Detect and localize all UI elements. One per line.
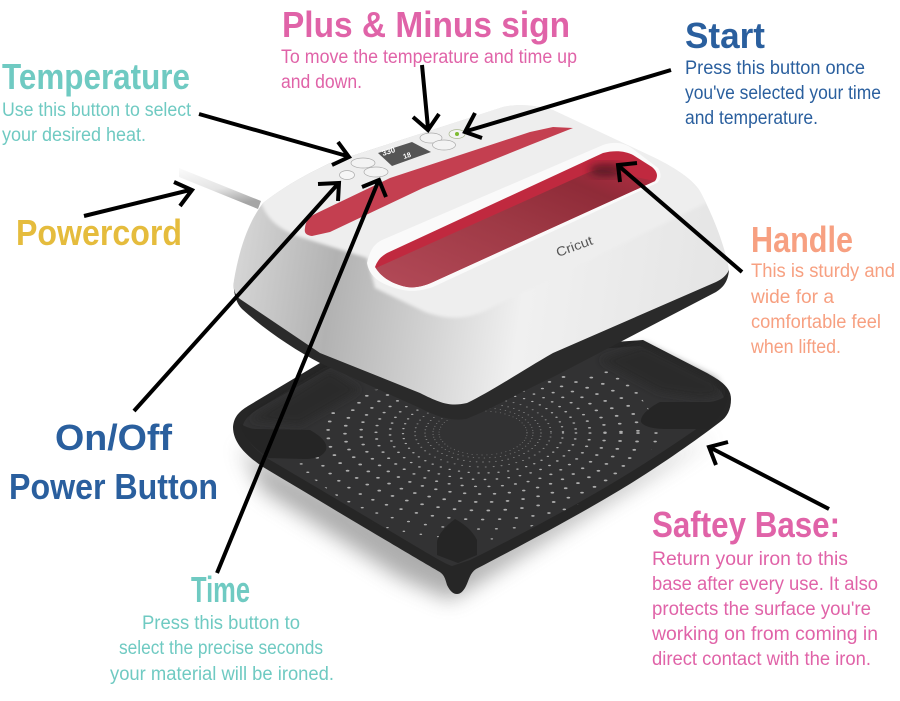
description: your desired heat. xyxy=(2,125,146,146)
arrow: on/off xyxy=(134,183,339,411)
description: Press this button once xyxy=(685,58,865,79)
display readout: 330 xyxy=(381,145,397,158)
description: you've selected your time xyxy=(685,83,881,104)
left foot xyxy=(240,424,326,459)
handle rim xyxy=(367,143,661,291)
arrow: handle xyxy=(618,163,742,272)
label: handle xyxy=(750,219,895,358)
label: time xyxy=(110,569,334,685)
cricut logo: Cricut xyxy=(554,233,595,260)
description: base after every use. It also xyxy=(652,574,878,595)
description: Return your iron to this xyxy=(652,549,848,570)
handle shadow xyxy=(589,163,623,177)
arrow: start xyxy=(465,70,671,138)
press shell xyxy=(234,105,729,405)
description: and temperature. xyxy=(685,108,818,129)
description: select the precise seconds xyxy=(119,638,323,659)
start icon xyxy=(455,132,459,136)
control panel xyxy=(340,130,465,180)
heading: Saftey Base: xyxy=(652,504,840,545)
description xyxy=(750,261,895,358)
display seconds: 18 xyxy=(402,152,412,161)
label: plus and minus xyxy=(281,4,577,93)
handle recess floor xyxy=(376,170,655,287)
description: Press this button to xyxy=(142,613,300,634)
arrow: plus and minus xyxy=(413,65,439,130)
description: and down. xyxy=(281,72,362,93)
power button xyxy=(340,170,354,180)
description: Use this button to select xyxy=(2,100,192,121)
press top face xyxy=(262,106,518,318)
time button xyxy=(364,167,388,177)
description: To move the temperature and time up xyxy=(281,47,577,68)
arrow: powercord xyxy=(84,182,192,216)
safety base xyxy=(233,327,731,600)
temperature button xyxy=(351,158,375,168)
description: when lifted. xyxy=(750,337,841,358)
description xyxy=(2,100,192,146)
arrow: time xyxy=(217,180,386,573)
description: your material will be ironed. xyxy=(110,664,334,685)
perforation holes xyxy=(300,372,658,540)
description xyxy=(685,58,881,129)
minus button xyxy=(432,140,456,150)
power cord xyxy=(179,168,261,209)
arrow: safety base xyxy=(709,442,829,509)
description: protects the surface you're xyxy=(652,599,871,620)
description xyxy=(651,549,878,670)
description: comfortable feel xyxy=(751,312,881,333)
description xyxy=(110,613,334,685)
description: wide for a xyxy=(750,287,834,308)
label: safety base xyxy=(651,504,878,670)
heading: Plus & Minus sign xyxy=(282,4,570,45)
arrow: temperature xyxy=(199,114,349,165)
base tray xyxy=(233,340,731,594)
label: on/off power button xyxy=(9,417,218,507)
red strip xyxy=(305,127,573,236)
handle recess xyxy=(375,151,657,287)
back walls xyxy=(250,345,722,425)
label: start xyxy=(685,15,881,129)
black bottom plate xyxy=(234,270,729,420)
bottom foot xyxy=(437,519,477,563)
heading: Temperature xyxy=(2,56,190,97)
label: on/off power button: Power Button xyxy=(9,466,218,507)
description: working on from coming in xyxy=(651,624,878,645)
label: on/off power button: On/Off xyxy=(55,417,173,458)
heat press xyxy=(234,95,729,420)
heading: Start xyxy=(685,15,765,56)
heading: Time xyxy=(191,569,250,610)
start button xyxy=(449,130,465,138)
display xyxy=(378,142,431,166)
heading: Handle xyxy=(751,219,853,260)
label: powercord: Powercord xyxy=(16,212,182,253)
base inner floor xyxy=(243,346,724,566)
right foot xyxy=(641,396,728,429)
base shadow xyxy=(240,436,715,600)
description xyxy=(281,47,577,93)
description: direct contact with the iron. xyxy=(652,649,871,670)
description: This is sturdy and xyxy=(751,261,895,282)
plus button xyxy=(420,133,442,143)
label: temperature xyxy=(2,56,192,146)
